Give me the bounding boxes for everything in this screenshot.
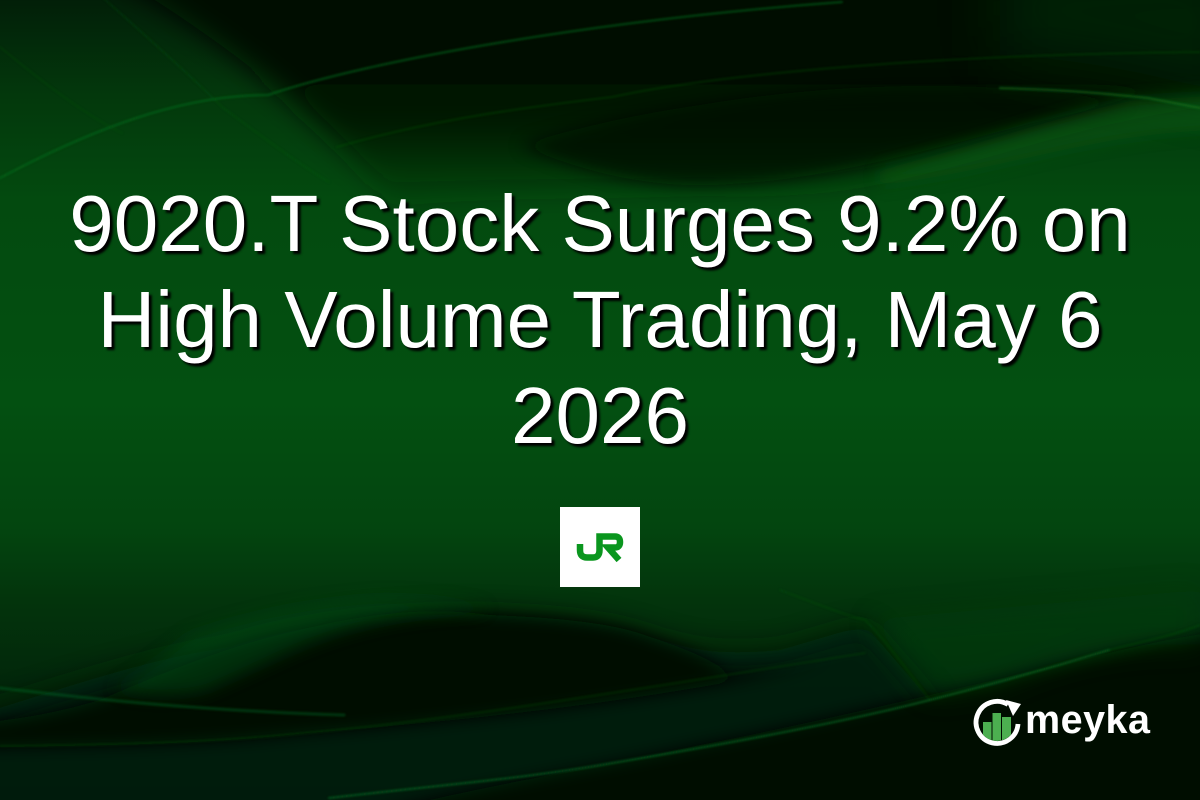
brand: meyka logo	[974, 698, 1150, 746]
logo: JR company mark	[560, 507, 640, 587]
brand name: meyka	[1025, 698, 1150, 742]
icon: circular arrow with bar chart	[974, 698, 1021, 746]
title: 9020.T Stock Surges 9.2% on High Volume Trading, May 6 2026	[69, 179, 1131, 460]
